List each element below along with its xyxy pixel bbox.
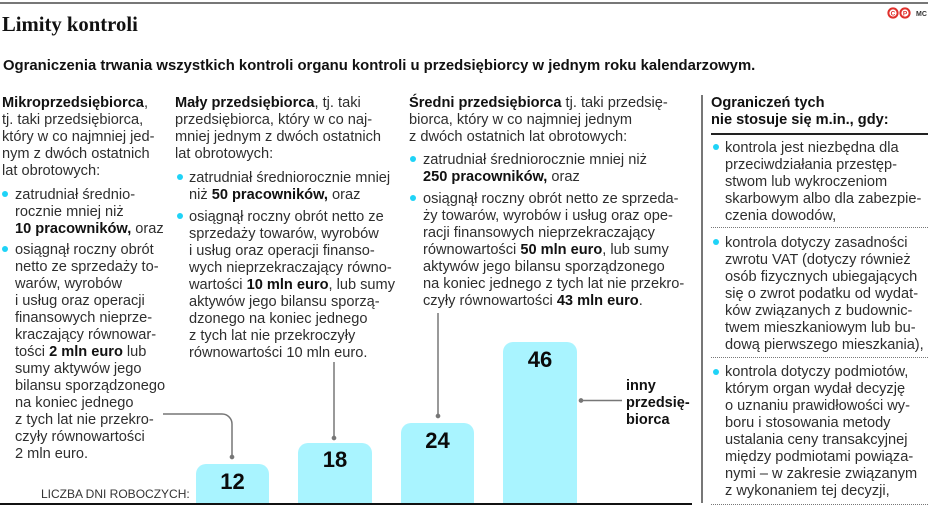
heading rule xyxy=(711,133,928,135)
bullet xyxy=(410,195,416,201)
bullet xyxy=(410,156,416,162)
exception 2: ków związanych z budownic- xyxy=(725,303,912,319)
employment criterion xyxy=(423,152,647,185)
leader: 46 xyxy=(579,399,622,402)
bar chart: liczba dni roboczych xyxy=(0,342,692,505)
panel: średni przedsiębiorca xyxy=(409,94,684,309)
turnover criterion xyxy=(423,191,684,309)
bullet xyxy=(713,369,719,375)
axis label: LICZBA DNI ROBOCZYCH: xyxy=(41,487,190,501)
heading: Ograniczeń tych xyxy=(711,95,825,111)
turnover criterion: 2 mln euro. xyxy=(15,446,88,462)
intro text: lat obrotowych: xyxy=(175,146,273,162)
turnover criterion: dzonego na koniec jednego xyxy=(189,311,368,327)
bar 18 xyxy=(298,443,372,504)
turnover criterion: równowartości 50 mln euro, lub sumy xyxy=(423,242,669,258)
employment criterion: zatrudniał średniorocznie mniej xyxy=(189,170,390,186)
intro text xyxy=(409,94,668,145)
turnover criterion: finansowych nieprze- xyxy=(15,310,152,326)
intro text: mniej jednym z dwóch ostatnich xyxy=(175,129,381,145)
panel: wyjątki xyxy=(711,95,928,499)
bullet xyxy=(2,191,8,197)
turnover criterion: sumy aktywów jego xyxy=(15,361,142,377)
bar 24 xyxy=(401,423,474,504)
turnover criterion: ży towarów, wyrobów i usług oraz ope- xyxy=(423,208,673,224)
intro text: lat obrotowych: xyxy=(2,163,100,179)
employment criterion: zatrudniał średniorocznie mniej niż xyxy=(423,152,647,168)
turnover criterion: aktywów jego bilansu sporzą- xyxy=(189,294,380,310)
exception 3: z wykonaniem tej decyzji, xyxy=(725,483,890,499)
turnover criterion: i usług oraz operacji finanso- xyxy=(189,243,375,259)
exception 1: przeciwdziałania przestęp- xyxy=(725,157,897,173)
turnover criterion: czyły równowartości xyxy=(15,429,145,445)
icon: source logos: C xyxy=(891,10,896,17)
exception 3: ustalania ceny transakcyjnej xyxy=(725,432,908,448)
top rule xyxy=(0,2,928,4)
turnover criterion: na koniec jednego z tych lat nie przekro- xyxy=(423,276,684,292)
exception 2: kontrola dotyczy zasadności xyxy=(725,235,908,251)
employment criterion xyxy=(15,187,164,237)
intro text xyxy=(175,95,381,162)
turnover criterion: z tych lat nie przekro- xyxy=(15,412,154,428)
exception 2: dową pierwszego mieszkania), xyxy=(725,337,924,353)
value 46: 46 xyxy=(528,347,552,372)
icon: source logos: P xyxy=(903,10,908,17)
value 24: 24 xyxy=(425,428,450,453)
turnover criterion: równowartości 10 mln euro. xyxy=(189,345,367,361)
exception 1: skarbowym albo dla zabezpie- xyxy=(725,191,921,207)
bullet xyxy=(713,144,719,150)
turnover criterion: aktywów jego bilansu sporządzonego xyxy=(423,259,665,275)
exception 3: boru i stosowania metody xyxy=(725,415,890,431)
exception 3: między podmiotami powiąza- xyxy=(725,449,913,465)
bullet xyxy=(2,246,8,252)
column divider xyxy=(701,95,703,503)
bullet xyxy=(177,213,183,219)
exception 2: zwrotu VAT (dotyczy również xyxy=(725,252,911,268)
turnover criterion: tości 2 mln euro lub xyxy=(15,344,146,360)
exception 3: o uznaniu prawidłowości wy- xyxy=(725,398,910,414)
turnover criterion xyxy=(15,242,165,462)
bullet xyxy=(177,174,183,180)
turnover criterion: wych nieprzekraczający równo- xyxy=(189,260,392,276)
leader: 18 xyxy=(332,362,336,440)
intro text: przedsiębiorca, który w co naj- xyxy=(175,112,372,128)
subtitle: Ograniczenia trwania wszystkich kontroli organu kontroli u przedsiębiorcy w jednym roku kalendarzowym. xyxy=(3,58,755,74)
employment criterion: niż 50 pracowników, oraz xyxy=(189,187,360,203)
turnover criterion: sprzedaży towarów, wyrobów xyxy=(189,226,379,242)
turnover criterion: wartości 10 mln euro, lub sumy xyxy=(189,277,395,293)
employment criterion: rocznie mniej niż xyxy=(15,204,124,220)
baseline xyxy=(0,503,692,505)
intro text: biorca, który w co najmniej jednym xyxy=(409,112,632,128)
intro text: z dwóch ostatnich lat obrotowych: xyxy=(409,129,627,145)
turnover criterion: osiągnął roczny obrót netto ze sprzeda- xyxy=(423,191,679,207)
intro text: tj. taki przedsiębiorca, xyxy=(2,112,143,128)
exception 1 xyxy=(725,140,921,224)
heading: nie stosuje się m.in., gdy: xyxy=(711,112,889,128)
turnover criterion: z tych lat nie przekroczyły xyxy=(189,328,355,344)
intro text xyxy=(2,95,154,179)
exception 1: kontrola jest niezbędna dla xyxy=(725,140,899,156)
employment criterion xyxy=(189,170,390,203)
turnover criterion: osiągnął roczny obrót netto ze xyxy=(189,209,384,225)
bar 46 xyxy=(503,342,577,504)
title: Limity kontroli xyxy=(2,14,138,36)
exception 3: którym organ wydał decyzję xyxy=(725,381,905,397)
exception 2: osób fizycznych ubiegających xyxy=(725,269,917,285)
exception 3: kontrola dotyczy podmiotów, xyxy=(725,364,908,380)
turnover criterion: bilansu sporządzonego xyxy=(15,378,165,394)
turnover criterion: kraczający równowar- xyxy=(15,327,156,343)
panel: mikroprzedsiębiorca xyxy=(2,95,165,462)
exception 3 xyxy=(725,364,917,499)
separators xyxy=(711,227,928,228)
value 18: 18 xyxy=(323,447,347,472)
bar 12 xyxy=(196,464,269,504)
value 12: 12 xyxy=(220,469,245,494)
turnover criterion: racji finansowych nieprzekraczający xyxy=(423,225,655,241)
icon: source logos: MC xyxy=(916,11,927,18)
intro text: który w co najmniej jed- xyxy=(2,129,154,145)
employment criterion: 10 pracowników, oraz xyxy=(15,221,164,237)
exception 2: się o zwrot podatku od wydat- xyxy=(725,286,918,302)
exception 3: nymi – w zakresie związanym xyxy=(725,466,917,482)
exception 1: czenia dowodów, xyxy=(725,208,836,224)
leader: 12 xyxy=(163,414,234,459)
turnover criterion: i usług oraz operacji xyxy=(15,293,145,309)
callout: inny przedsiębiorca: przedsię- xyxy=(626,395,690,411)
turnover criterion: osiągnął roczny obrót xyxy=(15,242,154,258)
turnover criterion: na koniec jednego xyxy=(15,395,133,411)
heading xyxy=(711,95,889,128)
bullet xyxy=(713,239,719,245)
turnover criterion xyxy=(189,209,395,361)
employment criterion: 250 pracowników, oraz xyxy=(423,169,580,185)
callout: inny przedsiębiorca: biorca xyxy=(626,412,670,428)
employment criterion: zatrudniał średnio- xyxy=(15,187,135,203)
icon: source logos xyxy=(887,7,927,19)
intro text: Średni przedsiębiorca tj. taki przedsię- xyxy=(409,95,668,111)
leader: 24 xyxy=(436,313,440,418)
callout: inny przedsiębiorca: inny xyxy=(626,378,656,394)
exception 2: twem mieszkaniowym lub bu- xyxy=(725,320,916,336)
intro text: Mały przedsiębiorca, tj. taki xyxy=(175,95,361,111)
intro text: nym z dwóch ostatnich xyxy=(2,146,150,162)
turnover criterion: netto ze sprzedaży to- xyxy=(15,259,159,275)
intro text: Mikroprzedsiębiorca, xyxy=(2,95,148,111)
turnover criterion: czyły równowartości 43 mln euro. xyxy=(423,293,643,309)
turnover criterion: warów, wyrobów xyxy=(15,276,122,292)
exception 2 xyxy=(725,235,924,353)
exception 1: stwom lub wykroczeniom xyxy=(725,174,887,190)
panel: mały przedsiębiorca xyxy=(175,95,395,361)
callout: inny przedsiębiorca xyxy=(626,378,690,428)
